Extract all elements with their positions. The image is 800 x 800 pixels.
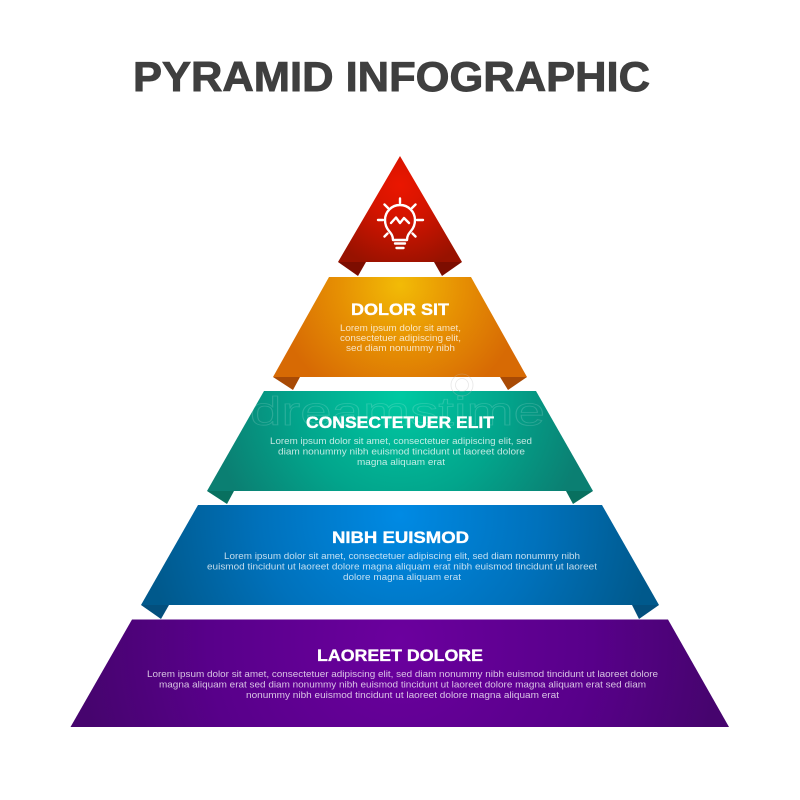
body text: dolor sit: sed diam nonummy nibh xyxy=(346,342,455,353)
red tier flaps xyxy=(338,262,462,276)
orange panel xyxy=(273,277,527,377)
tier 2: orange xyxy=(273,277,527,390)
body text: nibh euismod: Lorem ipsum dolor sit amet, consectetuer adipiscing elit, sed diam nonummy nibh xyxy=(224,550,580,561)
tier 5: purple xyxy=(70,620,729,727)
body text: consectetuer elit xyxy=(270,435,532,467)
body text: laoreet dolore: Lorem ipsum dolor sit amet, consectetuer adipiscing elit, sed diam nonummy nibh euismod tincidunt ut laoreet dolore xyxy=(147,668,658,679)
body text: dolor sit: Lorem ipsum dolor sit amet, xyxy=(340,322,461,333)
blue tier flaps xyxy=(141,605,659,619)
body text: nibh euismod: euismod tincidunt ut laoreet dolore magna aliquam erat nibh euismod tincidunt ut laoreet xyxy=(207,560,597,572)
body text: consectetuer elit: magna aliquam erat xyxy=(357,456,445,467)
body text: consectetuer elit: Lorem ipsum dolor sit amet, consectetuer adipiscing elit, sed xyxy=(270,435,532,446)
heading: nibh euismod: NIBH EUISMOD xyxy=(332,529,469,547)
blue panel xyxy=(141,505,659,605)
purple panel xyxy=(70,620,729,727)
body text: consectetuer elit: diam nonummy nibh euismod tincidunt ut laoreet dolore xyxy=(278,446,525,456)
orange tier flaps xyxy=(273,377,527,390)
body text: laoreet dolore xyxy=(147,668,658,700)
title: PYRAMID INFOGRAPHIC xyxy=(133,53,650,100)
red triangle xyxy=(338,156,462,262)
body text: laoreet dolore: magna aliquam erat sed diam nonummy nibh euismod tincidunt ut laoreet dolore magna aliquam erat sed diam xyxy=(159,678,646,690)
teal tier flaps xyxy=(207,491,593,504)
heading: laoreet dolore: LAOREET DOLORE xyxy=(317,647,483,665)
body text: dolor sit: consectetuer adipiscing elit, xyxy=(340,332,461,343)
body text: laoreet dolore: nonummy nibh euismod tincidunt ut laoreet dolore magna aliquam erat xyxy=(246,689,559,700)
body text: dolor sit xyxy=(340,322,461,353)
tier 4: blue xyxy=(141,505,659,619)
icon: light bulb xyxy=(378,198,423,248)
watermark: dreamstime xyxy=(250,390,545,434)
heading: consectetuer elit: CONSECTETUER ELIT xyxy=(306,414,494,432)
body text: nibh euismod: dolore magna aliquam erat xyxy=(343,571,461,582)
watermark xyxy=(250,374,545,434)
heading: dolor sit: DOLOR SIT xyxy=(351,301,449,319)
teal panel xyxy=(207,391,593,491)
body text: nibh euismod xyxy=(207,550,597,582)
tier 3: teal xyxy=(207,374,593,504)
tier 1: red apex with icon xyxy=(338,156,462,276)
